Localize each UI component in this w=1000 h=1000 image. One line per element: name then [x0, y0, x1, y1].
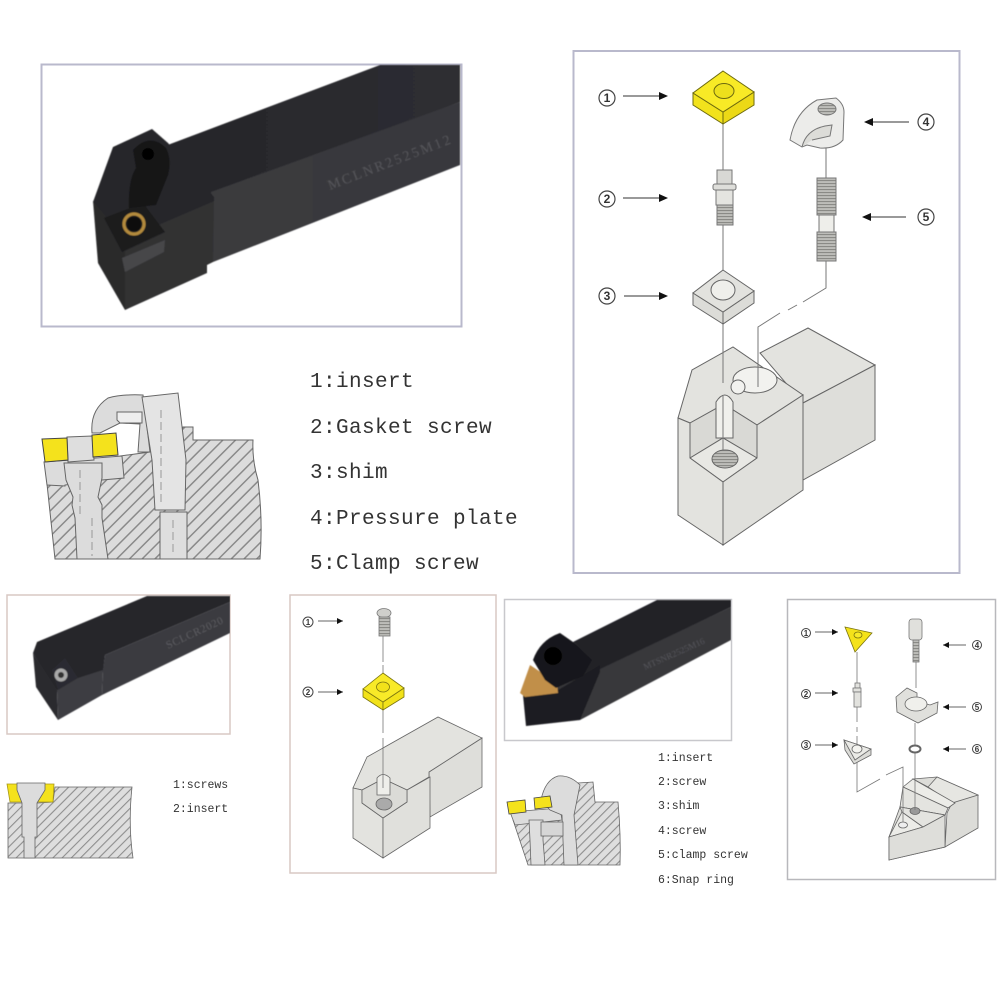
photo: MCLNR tool holder: MCLNR2525M12 [326, 133, 453, 194]
icon: part 5 clamp [896, 688, 938, 723]
callouts 1 and 2: 2 [306, 688, 311, 697]
legend: six parts: 1:insert [658, 752, 713, 765]
holder body [678, 328, 875, 545]
callouts 1 and 2 [303, 617, 343, 697]
holder body [889, 777, 978, 860]
icon: part 4 pressure plate [790, 98, 844, 148]
icon: part 2 gasket screw [713, 170, 736, 225]
legend: main parts [310, 371, 518, 576]
callouts 1 to 6: 1 [804, 629, 809, 638]
panel: SCLCR tool photo [7, 595, 230, 734]
centre lines [857, 652, 916, 822]
legend: main parts: 3:shim [310, 462, 388, 485]
legend: six parts: 6:Snap ring [658, 874, 734, 887]
icon: part 6 snap ring [910, 746, 920, 752]
legend: six parts: 5:clamp screw [658, 849, 748, 862]
callouts 1 to 6: 3 [804, 741, 809, 750]
icon: part 2 screw [853, 683, 861, 707]
callouts 1 to 6: 6 [975, 745, 980, 754]
panel: exploded view, five parts [574, 51, 960, 573]
holder body [353, 717, 482, 858]
legend: six parts: 3:shim [658, 800, 700, 813]
panel: exploded view, six parts [788, 600, 996, 880]
legend: six parts: 2:screw [658, 776, 706, 789]
legend: screws and insert [173, 779, 228, 816]
cross section: screw and insert [7, 783, 133, 858]
callouts 1 to 5: 2 [604, 192, 611, 206]
callouts 1 to 6: 2 [804, 690, 809, 699]
icon: screw [377, 608, 391, 636]
insert section [42, 438, 68, 462]
icon: part 4 screw [909, 619, 922, 662]
panel: SCLCR tool photo: SCLCR2020 [164, 615, 226, 652]
legend: main parts: 5:Clamp screw [310, 553, 479, 576]
callouts 1 to 6: 4 [975, 641, 980, 650]
centre line [382, 636, 384, 788]
panel: exploded view, two parts [290, 595, 496, 873]
icon: part 3 shim [844, 740, 871, 764]
icon: part 1 insert [845, 627, 872, 652]
legend: main parts: 4:Pressure plate [310, 508, 518, 531]
legend: main parts: 2:Gasket screw [310, 417, 492, 440]
panel: MTSNR tool photo: MTSNR2525M16 [642, 636, 707, 672]
callouts 1 to 5: 1 [604, 91, 611, 105]
cross section: main assembly [42, 393, 261, 559]
cross section: clamp assembly [507, 776, 620, 865]
legend: screws and insert: 1:screws [173, 779, 228, 792]
callouts 1 to 5 [599, 90, 934, 304]
callouts 1 to 5: 5 [923, 210, 930, 224]
callouts 1 to 6: 5 [975, 703, 980, 712]
callouts 1 to 5: 3 [604, 289, 611, 303]
icon: part 1 insert [693, 71, 754, 124]
legend: six parts [658, 752, 748, 887]
centre lines [723, 124, 826, 450]
callouts 1 and 2: 1 [306, 618, 311, 627]
callouts 1 to 6 [802, 628, 982, 754]
panel: MTSNR tool photo [504, 600, 732, 740]
legend: main parts: 1:insert [310, 371, 414, 394]
callouts 1 to 5: 4 [923, 115, 930, 129]
photo: MCLNR tool holder [93, 65, 460, 310]
legend: screws and insert: 2:insert [173, 803, 228, 816]
panel: main tool photo [42, 64, 462, 326]
icon: insert [363, 673, 404, 710]
legend: six parts: 4:screw [658, 825, 706, 838]
icon: part 3 shim [693, 270, 754, 324]
icon: part 5 clamp screw [817, 178, 836, 261]
